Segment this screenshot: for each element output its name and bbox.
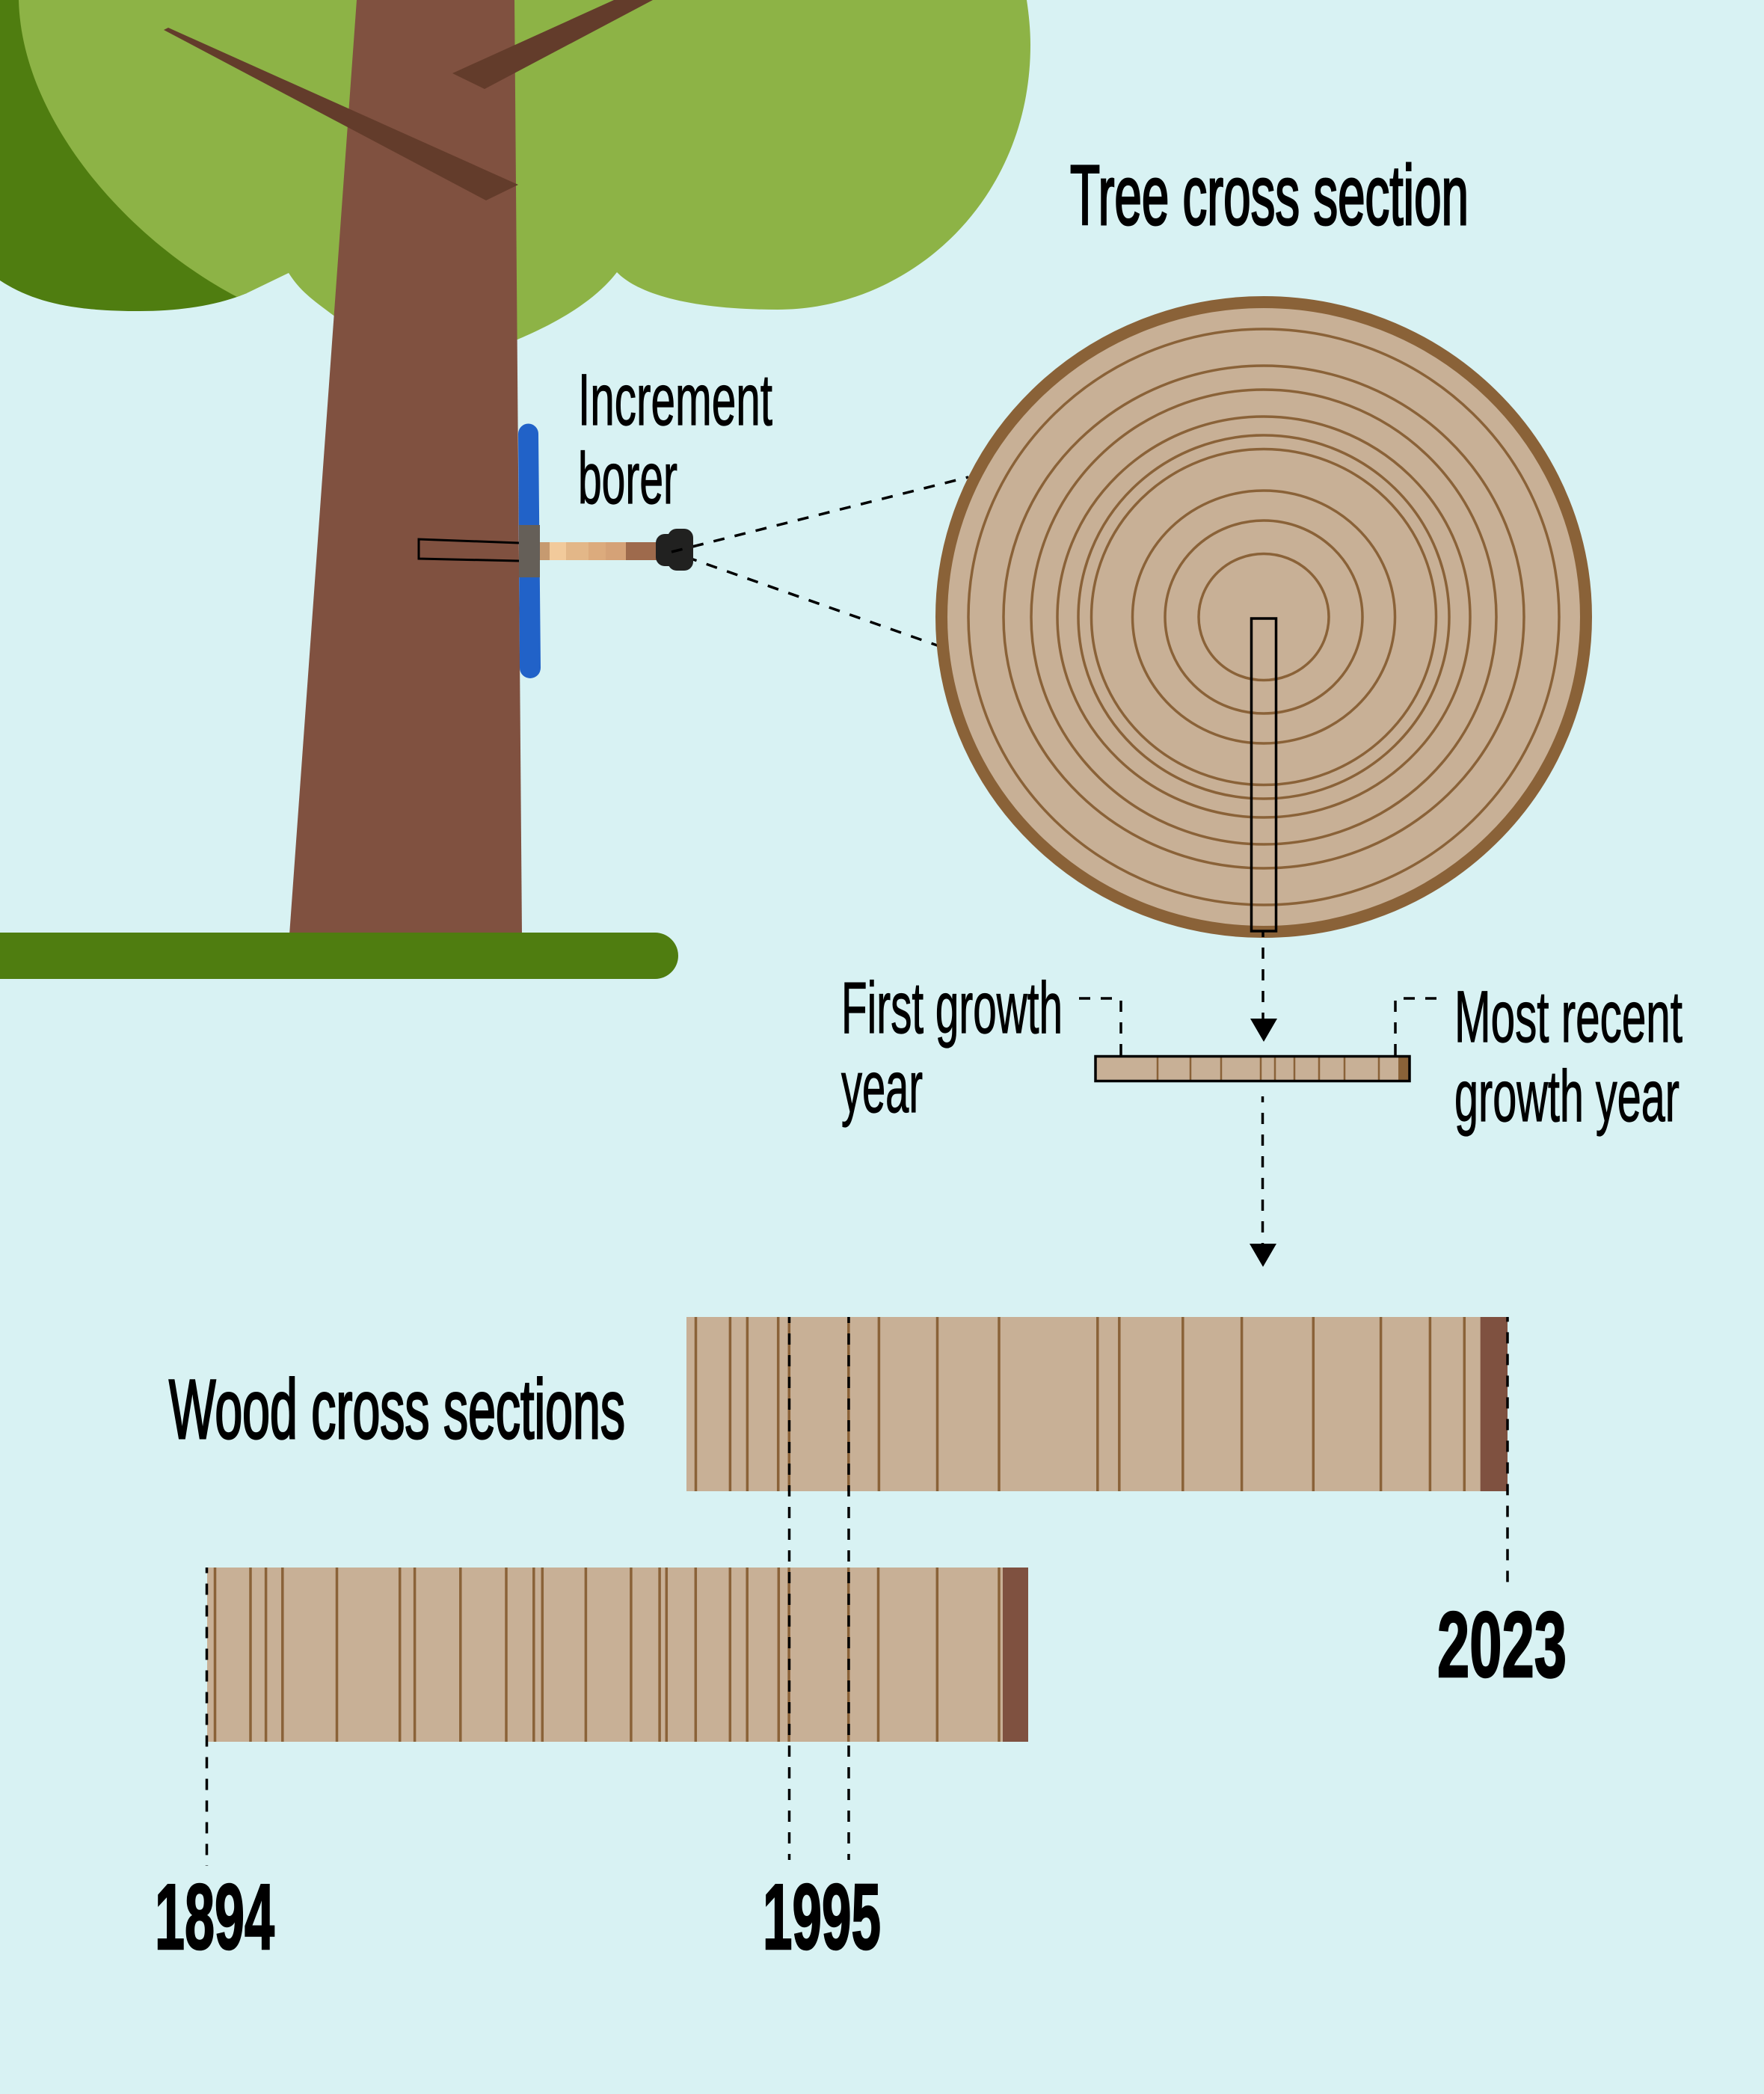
strip rings — [1158, 1057, 1379, 1080]
year label: 1995: 1995 — [763, 1866, 881, 1969]
arrow: core strip to wood sections — [1250, 1096, 1276, 1267]
tree cross section disc — [941, 302, 1586, 932]
core outline in trunk — [419, 539, 519, 561]
year guide: 2023 — [1506, 1317, 1509, 1591]
blue handle — [518, 423, 541, 678]
label: increment borer: Increment — [578, 359, 772, 440]
canopy: light foliage — [19, 0, 1030, 340]
heading: tree cross section: Tree cross section — [1070, 148, 1469, 242]
wood cross section: recent sample — [686, 1317, 1508, 1491]
label: increment borer — [578, 359, 772, 519]
rings — [695, 1317, 1464, 1491]
canopy: dark foliage — [0, 0, 247, 311]
disc body and bark — [941, 302, 1586, 932]
ground — [0, 933, 678, 979]
tree illustration — [0, 0, 1030, 979]
label: first growth year: year — [841, 1046, 923, 1128]
year label: 2023: 2023 — [1437, 1594, 1567, 1697]
black tip — [656, 529, 693, 571]
grey collar — [519, 525, 540, 577]
right branch — [452, 0, 653, 89]
label: first growth year — [841, 967, 1063, 1128]
core sample outline — [1252, 618, 1276, 931]
label: increment borer: borer — [578, 437, 677, 519]
year guide: 1995 end — [847, 1317, 850, 1860]
extracted wood core — [540, 542, 657, 560]
callout: most recent growth year leader — [1395, 998, 1436, 1055]
bark — [1003, 1568, 1028, 1742]
dashed lines from borer to cross section — [666, 477, 968, 647]
heading: wood cross sections: Wood cross sections — [169, 1363, 625, 1456]
label: first growth year: First growth — [841, 967, 1063, 1048]
increment borer tool — [419, 423, 693, 678]
year guide: 1995 start — [788, 1317, 790, 1860]
left branch — [164, 28, 518, 200]
growth rings — [968, 329, 1559, 905]
trunk — [289, 0, 522, 935]
year guide: 1894 — [206, 1568, 208, 1866]
callout: first growth year leader — [1079, 998, 1121, 1055]
bark — [1481, 1317, 1508, 1491]
label: most recent growth year — [1454, 976, 1682, 1137]
core strip — [1095, 1056, 1410, 1081]
rings — [215, 1568, 999, 1742]
year label: 1894: 1894 — [155, 1866, 274, 1969]
arrow: disc to core strip — [1250, 932, 1277, 1042]
wood cross section: older sample — [207, 1568, 1028, 1742]
dashes over the black tip — [672, 546, 695, 552]
most recent growth band — [1398, 1056, 1410, 1081]
